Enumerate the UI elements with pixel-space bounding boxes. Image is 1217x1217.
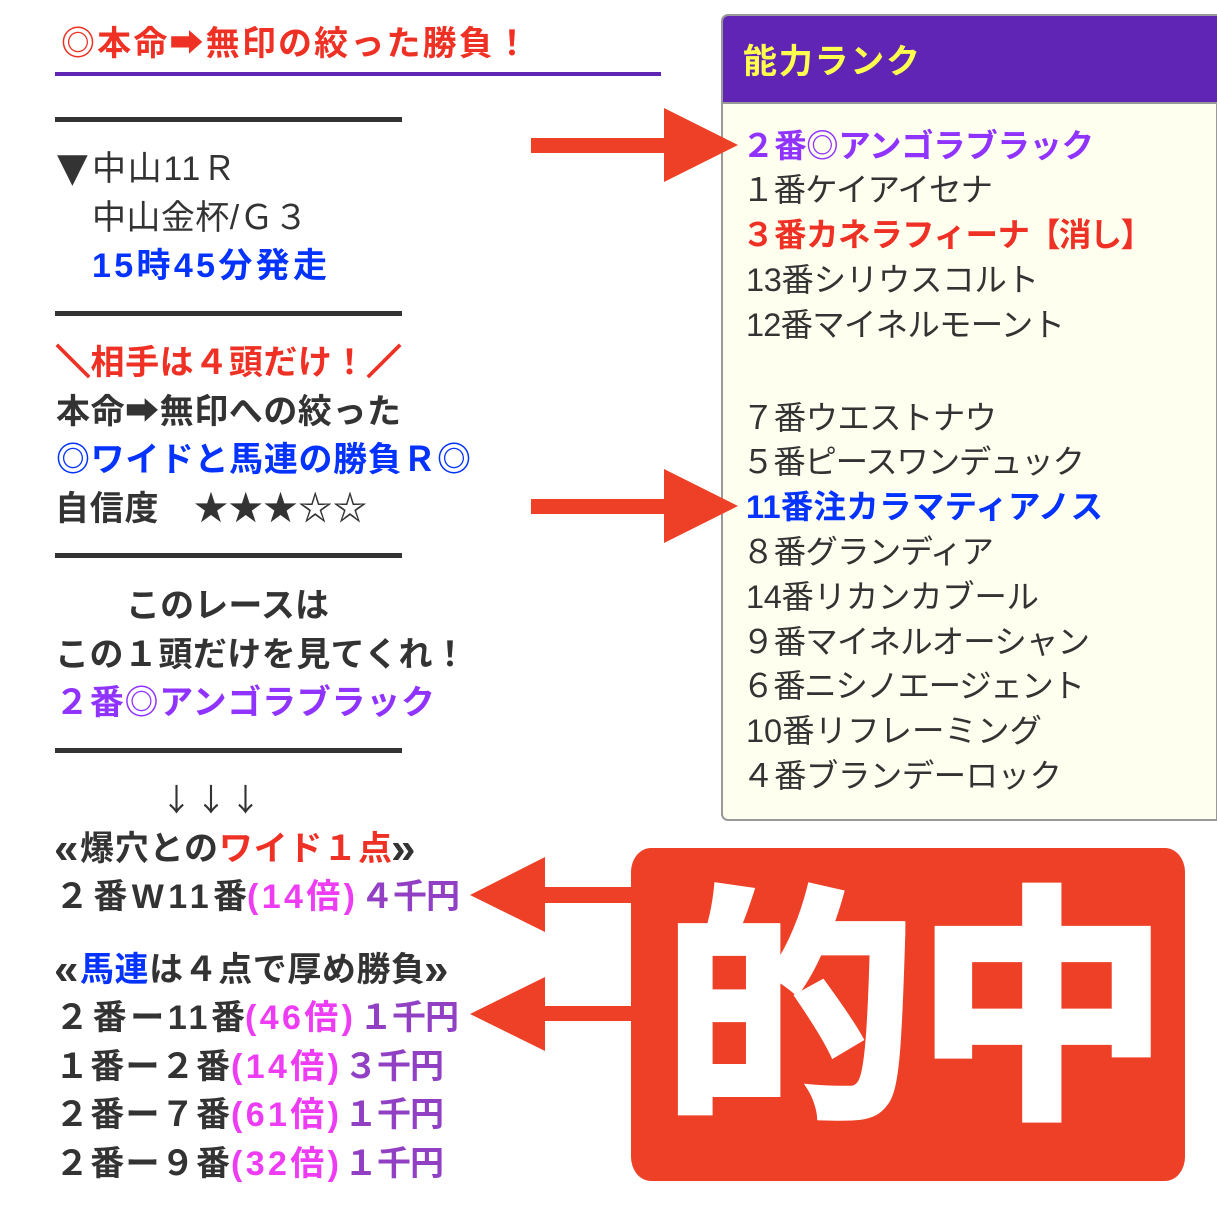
panel header: 能力ランク	[743, 43, 920, 81]
umaren bet block: ２番ー11番	[55, 999, 245, 1037]
umaren bet block: (61倍)	[231, 1096, 339, 1134]
confidence block: ◎ワイドと馬連の勝負Ｒ◎	[56, 441, 471, 479]
wide bet block: ２番W11番	[55, 878, 247, 916]
down arrows: ↓↓↓	[161, 775, 264, 820]
confidence block: 自信度 ★★★☆☆	[55, 490, 367, 528]
rank list lower: ４番ブランデーロック	[742, 758, 1062, 794]
wide bet block: »	[391, 824, 415, 873]
rank list lower: ５番ピースワンデュック	[742, 444, 1085, 480]
arrow: hit to umaren bet	[470, 977, 631, 1051]
title: ◎本命➡無印の絞った勝負！	[61, 25, 529, 63]
umaren bet block: (32倍)	[231, 1145, 339, 1183]
arrow: to favourite horse	[531, 108, 738, 182]
race info block: 15時45分発走	[92, 247, 327, 285]
rank list lower: 14番リカンカブール	[746, 579, 1039, 615]
umaren bet block: »	[424, 945, 448, 994]
confidence block	[55, 344, 471, 558]
race info block: 中山11Ｒ	[92, 150, 236, 188]
umaren bet block	[54, 945, 459, 1183]
rank list lower: ６番ニシノエージェント	[742, 668, 1085, 704]
panel: ability rank	[722, 15, 1217, 820]
rank list lower: ９番マイネルオーシャン	[742, 624, 1090, 660]
race info block	[55, 117, 402, 316]
wide bet block	[54, 824, 460, 916]
umaren bet block: «	[54, 945, 78, 994]
umaren bet block: １千円	[344, 1096, 444, 1134]
umaren bet block: ３千円	[344, 1048, 444, 1086]
rank list upper: ３番カネラフィーナ	[742, 217, 1030, 253]
hit stamp: 的中	[663, 873, 1169, 1150]
confidence block: 本命➡無印への絞った	[56, 393, 401, 431]
umaren bet block: (46倍)	[245, 999, 353, 1037]
umaren bet block: １千円	[359, 999, 459, 1037]
rank list lower	[742, 400, 1103, 794]
rank list upper: 13番シリウスコルト	[746, 262, 1039, 298]
wide bet block: ４千円	[360, 878, 460, 916]
panel header	[722, 16, 1217, 104]
arrow: to outsider horse	[531, 469, 738, 543]
rank list upper	[742, 127, 1153, 343]
confidence block: ＼相手は４頭だけ！／	[56, 344, 401, 382]
rank list upper: １番ケイアイセナ	[742, 172, 993, 208]
title	[55, 25, 661, 76]
focus horse block: このレースは	[126, 587, 329, 625]
rank list upper: 12番マイネルモーント	[746, 307, 1065, 343]
race info block: 中山金杯/Ｇ３	[92, 199, 308, 237]
wide bet block: (14倍)	[247, 878, 355, 916]
umaren bet block: 馬連は４点で厚め勝負	[80, 951, 425, 989]
rank list upper: ２番◎アンゴラブラック	[742, 127, 1094, 164]
wide bet block: «	[54, 824, 78, 873]
rank list lower: 11番注カラマティアノス	[746, 489, 1103, 525]
rank list lower: ７番ウエストナウ	[742, 400, 997, 436]
focus horse block: この１頭だけを見てくれ！	[55, 636, 467, 674]
arrow: hit to wide bet	[470, 857, 631, 932]
umaren bet block: ２番ー９番	[55, 1145, 230, 1183]
focus horse block	[55, 587, 467, 753]
race info block: ▼	[57, 145, 88, 191]
rank list lower: 10番リフレーミング	[746, 713, 1042, 749]
umaren bet block: １千円	[344, 1145, 444, 1183]
rank list lower: ８番グランディア	[742, 534, 994, 570]
umaren bet block: (14倍)	[231, 1048, 339, 1086]
rank list upper: 【消し】	[1028, 217, 1153, 253]
umaren bet block: ２番ー７番	[55, 1096, 230, 1134]
umaren bet block: １番ー２番	[55, 1048, 230, 1086]
focus horse block: ２番◎アンゴラブラック	[55, 683, 435, 722]
wide bet block: 爆穴とのワイド１点	[80, 830, 392, 868]
